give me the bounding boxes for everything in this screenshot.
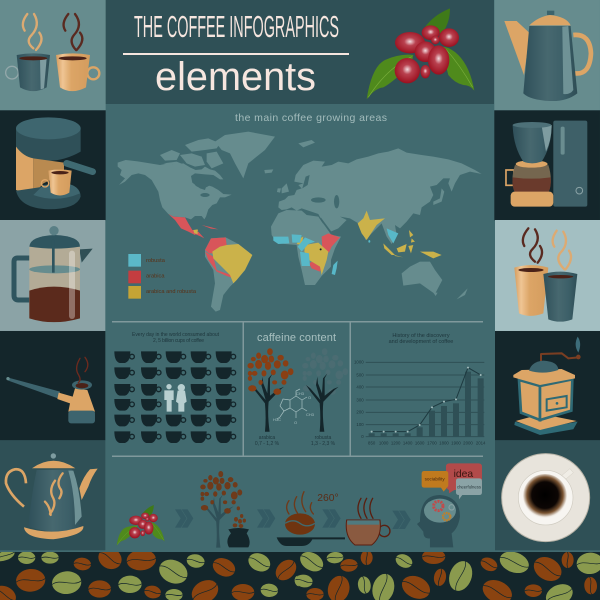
section dividers xyxy=(112,321,483,457)
bar and line chart: 0 xyxy=(361,434,364,439)
bar and line chart: 2014 xyxy=(476,441,486,446)
panel: daily consumption: 2, 5 billion cups of coffee xyxy=(153,338,204,344)
icon: man and woman xyxy=(164,384,187,412)
bar and line chart: 1700 xyxy=(427,441,437,446)
label: temperature: 260° xyxy=(317,493,339,504)
tree: arabica xyxy=(248,349,293,432)
bubble: sociability xyxy=(422,471,448,492)
step: head with ideas: sociability xyxy=(425,477,445,483)
panel: coffee process flow xyxy=(117,463,482,548)
heading: growing areas: the main coffee growing areas xyxy=(235,112,387,124)
tile: kettle xyxy=(0,440,105,550)
bar and line chart: 1200 xyxy=(391,441,401,446)
step: roasting pan xyxy=(277,492,345,546)
bar and line chart: 300 xyxy=(356,397,364,402)
bubble: cheerfulness xyxy=(456,478,482,499)
step: head with ideas xyxy=(417,463,482,547)
tile: two coffee cups with steam xyxy=(0,0,106,110)
panel: daily consumption xyxy=(114,332,236,443)
bar and line chart: 200 xyxy=(356,410,364,415)
label: robusta: robusta xyxy=(315,435,332,441)
molecule labels: O xyxy=(294,420,297,425)
value: arabica: 0,7 - 1,2 % xyxy=(255,441,280,447)
molecule labels: CH3 xyxy=(296,391,305,396)
bubble: idea xyxy=(446,463,482,493)
bar and line chart xyxy=(354,360,486,446)
bar and line chart: 1000 xyxy=(379,441,389,446)
title rule xyxy=(123,53,349,55)
panel: caffeine content xyxy=(248,332,348,447)
caffeine molecule xyxy=(273,389,315,425)
value: robusta: 1,3 - 2,3 % xyxy=(311,441,336,447)
molecule labels xyxy=(273,391,315,425)
tile: coffee pot xyxy=(494,0,600,110)
consumption text: Every day in the world consumed about xyxy=(132,332,220,338)
tile: espresso machine xyxy=(0,110,106,220)
tile: cup top view xyxy=(495,440,600,550)
bar and line chart: 400 xyxy=(356,384,364,389)
footer band: coffee bean pattern xyxy=(0,552,600,600)
bar and line chart: 2000 xyxy=(463,441,473,446)
map legend xyxy=(128,254,197,299)
label: arabica: arabica xyxy=(259,435,275,441)
bar and line chart: 500 xyxy=(356,372,364,377)
step: cup of coffee xyxy=(346,498,390,545)
heading: elements: elements xyxy=(155,55,316,99)
tile: two takeaway cups xyxy=(495,220,600,331)
panel: history chart: and development of coffee xyxy=(389,339,453,345)
molecule labels: CH3 xyxy=(306,412,315,417)
bar and line chart: 1900 xyxy=(451,441,461,446)
bar and line chart: 1600 xyxy=(415,441,425,446)
bar and line chart: 850 xyxy=(368,441,376,446)
bar and line chart: 100 xyxy=(356,422,364,427)
panel: title header xyxy=(105,0,494,104)
arrow xyxy=(175,509,193,528)
step: head with ideas: idea xyxy=(454,469,473,480)
tile: coffee grinder xyxy=(495,331,600,440)
bar and line chart: 1800 xyxy=(439,441,449,446)
tree: robusta xyxy=(303,349,348,432)
bar and line chart: 1000 xyxy=(354,360,364,365)
chart heading: History of the discovery xyxy=(392,333,450,339)
panel: title header: THE COFFEE INFOGRAPHICS xyxy=(134,9,339,44)
panel: world map xyxy=(118,112,482,312)
tile: cezve turkish coffee pot xyxy=(0,331,105,440)
tile: french press xyxy=(0,220,105,331)
step: coffee tree and sack xyxy=(201,471,250,548)
map of coffee growing regions xyxy=(118,132,482,312)
arrow xyxy=(392,511,411,529)
map legend: arabica xyxy=(146,274,165,280)
cup grid pictogram xyxy=(114,351,236,443)
step: head with ideas: cheerfulness xyxy=(457,484,481,490)
arrow xyxy=(257,509,275,528)
step: coffee berries xyxy=(117,505,165,546)
map legend: arabica and robusta xyxy=(146,289,197,295)
arrow xyxy=(322,509,341,528)
bar and line chart: 1400 xyxy=(403,441,413,446)
tile: drip coffee maker xyxy=(494,110,600,220)
icon: coffee berries branch xyxy=(367,8,474,99)
panel: history chart xyxy=(354,333,486,446)
heading: caffeine content: caffeine content xyxy=(257,332,336,344)
map legend: robusta xyxy=(146,258,166,264)
molecule labels: H3C xyxy=(273,417,281,422)
molecule labels: O xyxy=(308,395,311,400)
